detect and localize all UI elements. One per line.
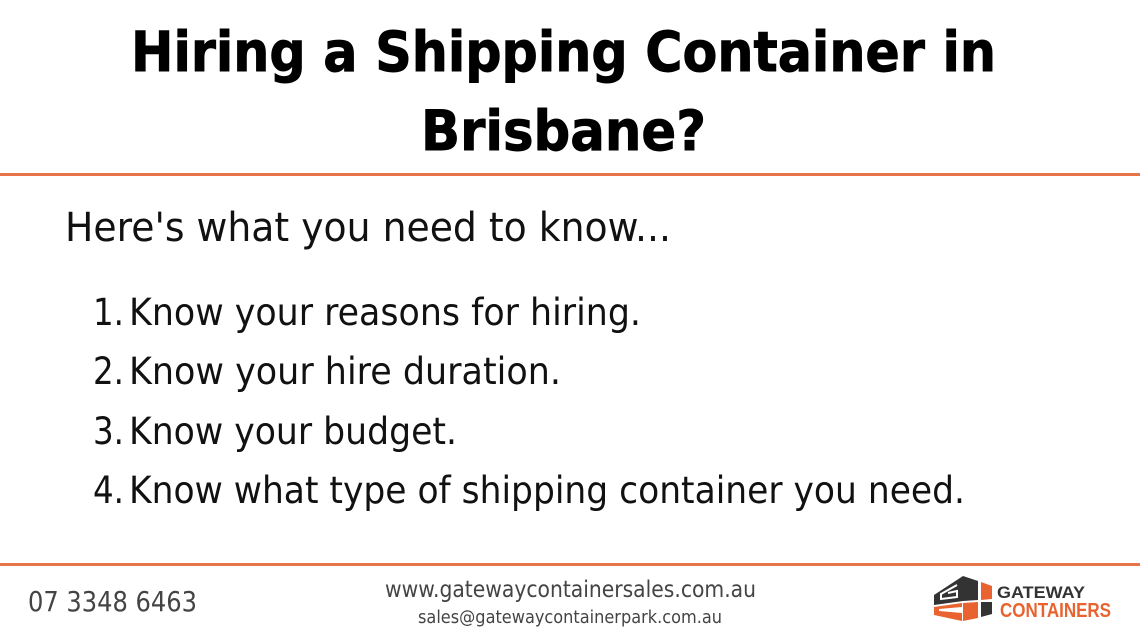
list item 1: Know your reasons for hiring. xyxy=(129,291,641,334)
list item 3: 3. xyxy=(93,410,124,453)
list item 4: Know what type of shipping container you need. xyxy=(129,469,965,512)
title xyxy=(131,20,996,163)
title: Brisbane? xyxy=(421,99,706,163)
list item 3: Know your budget. xyxy=(129,410,457,453)
logo icon: container xyxy=(934,576,992,621)
list item 4: 4. xyxy=(93,469,124,512)
logo xyxy=(934,576,1111,622)
title: Hiring a Shipping Container in xyxy=(131,20,996,84)
numbered list xyxy=(93,291,965,512)
logo wordmark xyxy=(997,583,1111,622)
website: www.gatewaycontainersales.com.au xyxy=(385,577,756,603)
list item 1: 1. xyxy=(93,291,124,334)
logo wordmark: CONTAINERS xyxy=(1000,600,1111,622)
phone number: 07 3348 6463 xyxy=(28,585,197,618)
list item 2: 2. xyxy=(93,350,124,393)
email: sales@gatewaycontainerpark.com.au xyxy=(418,607,722,628)
list item 2: Know your hire duration. xyxy=(129,350,561,393)
subheading: Here's what you need to know... xyxy=(65,205,671,251)
logo wordmark: GATEWAY xyxy=(997,583,1086,602)
